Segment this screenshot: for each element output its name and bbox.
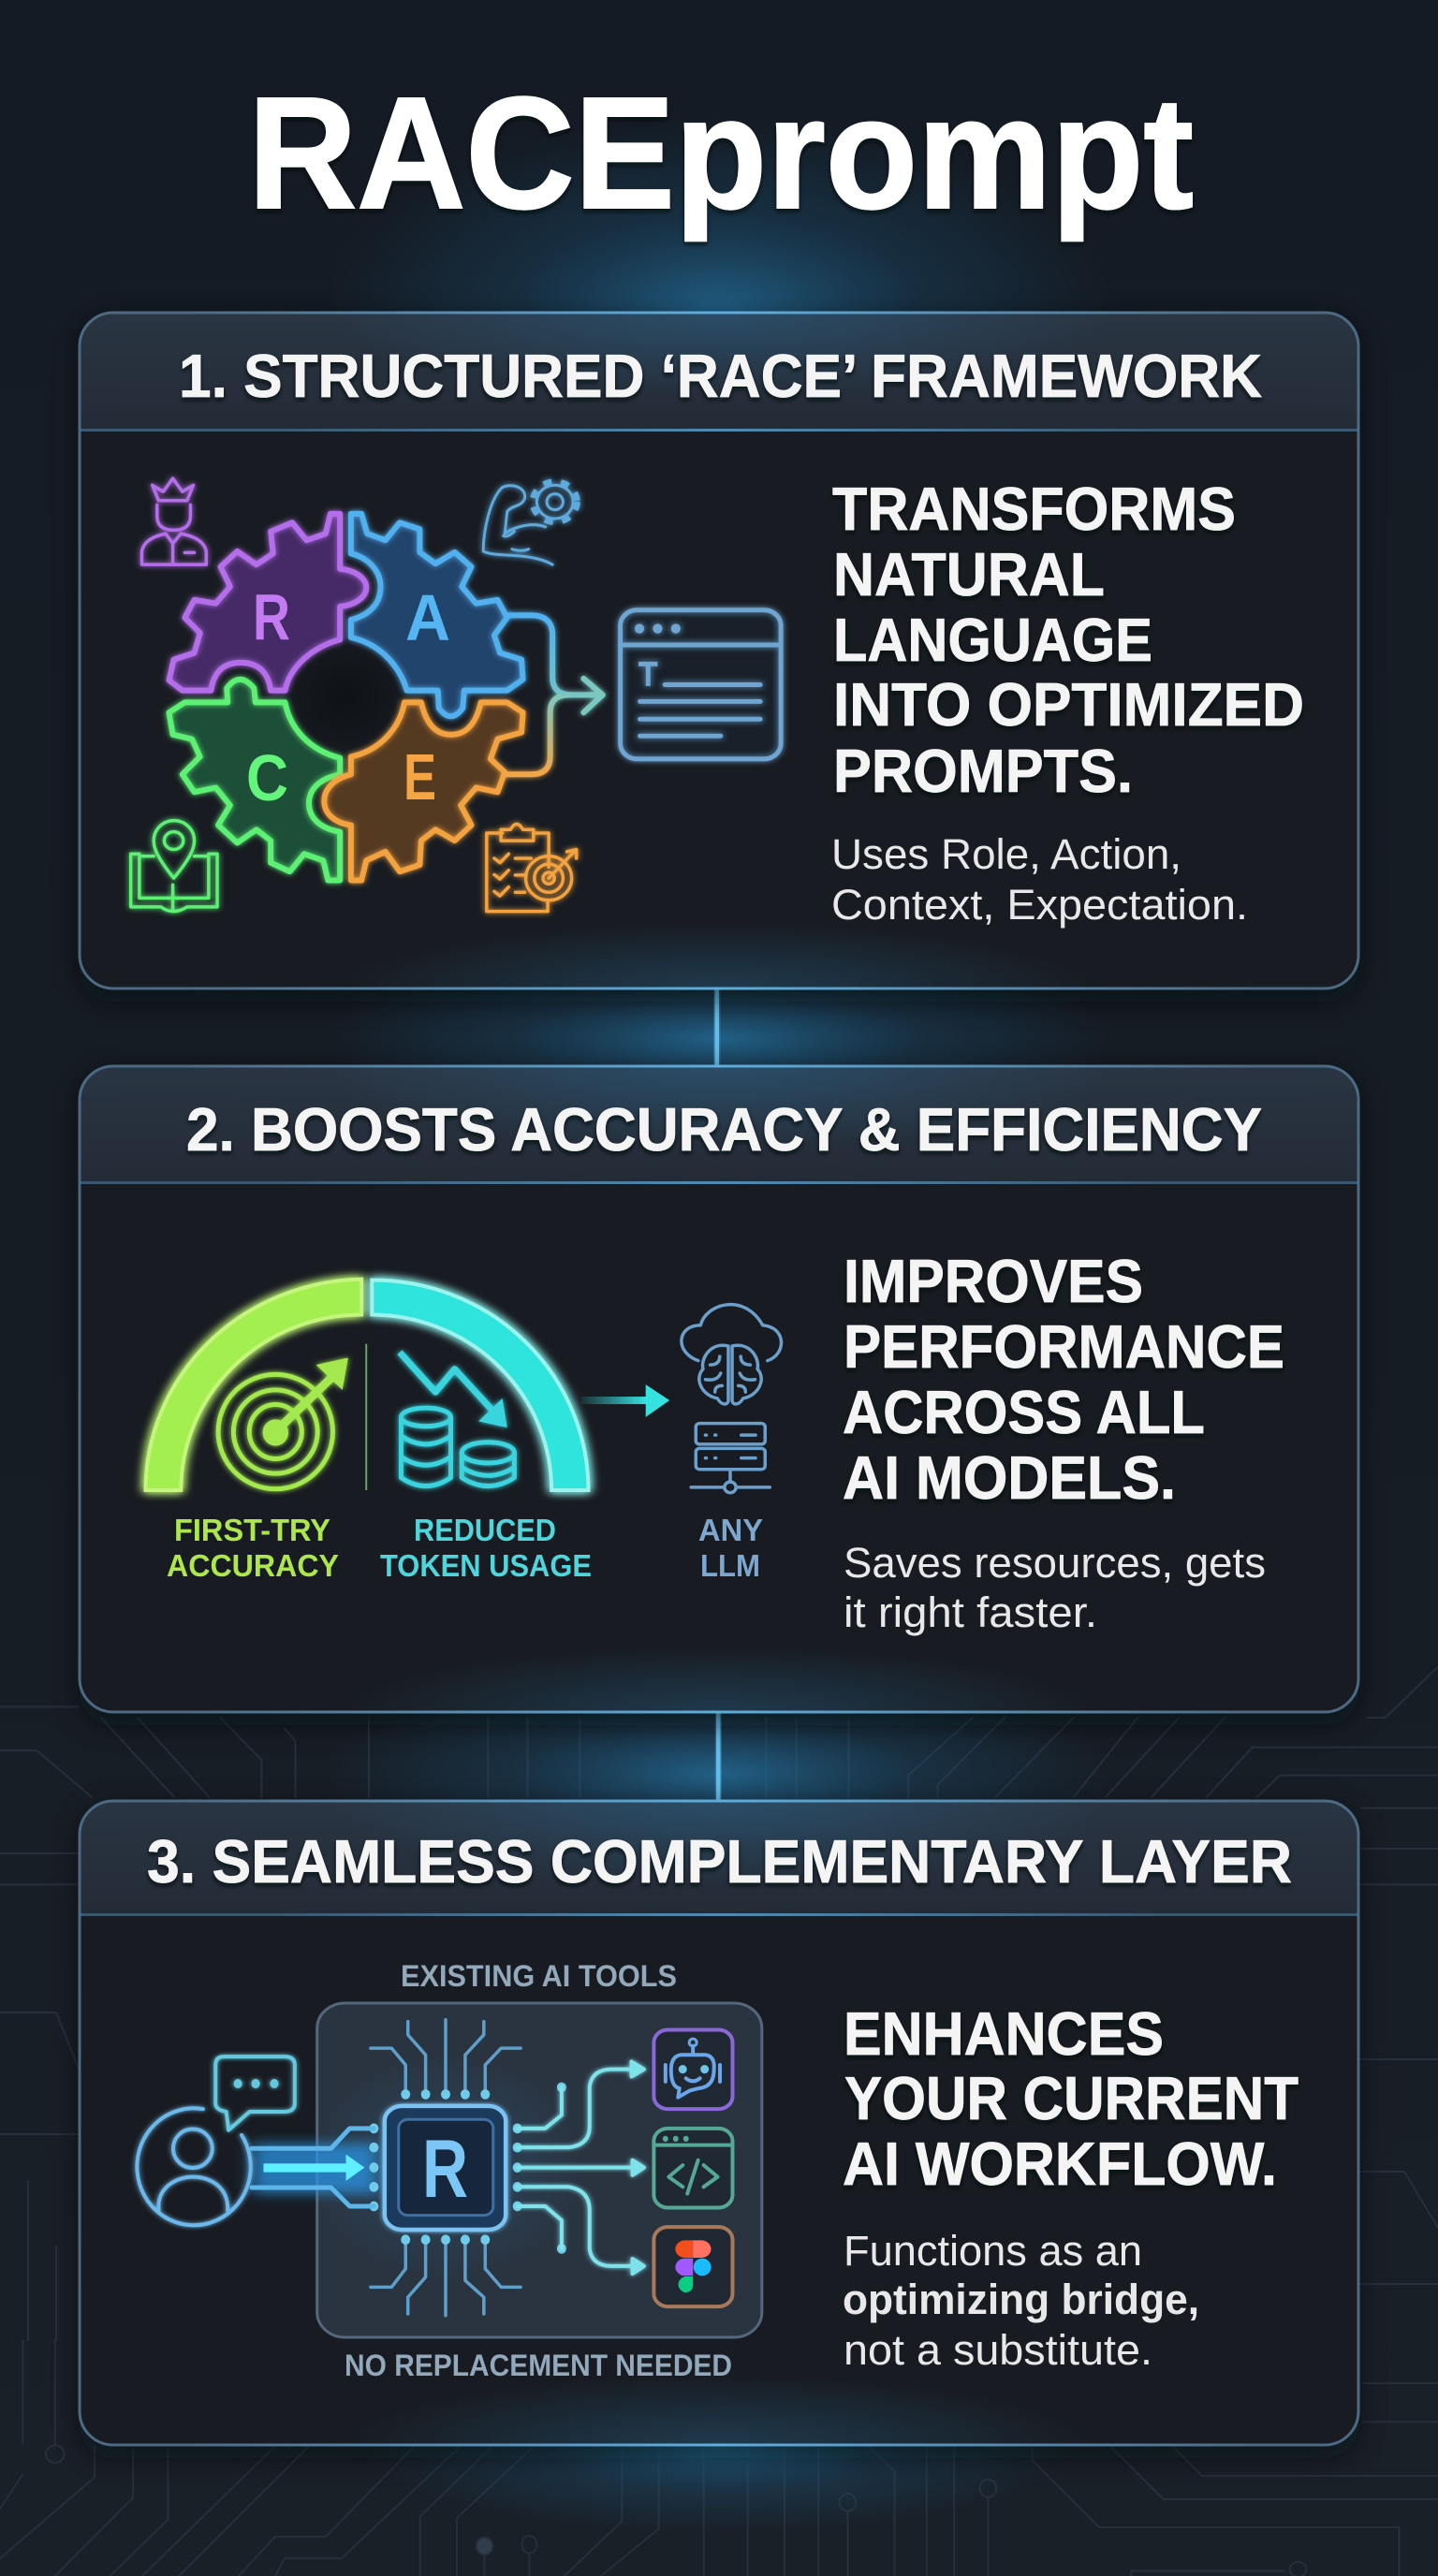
gear letters: A <box>405 581 450 654</box>
heading: card 2: 2. BOOSTS ACCURACY & EFFICIENCY <box>186 1095 1262 1164</box>
text block: card 3 detail <box>843 2227 1199 2374</box>
panel: structured RACE framework <box>77 303 1361 1020</box>
connector glow upper <box>326 941 1112 1137</box>
text block: card 1 statement: TRANSFORMS <box>832 475 1236 543</box>
icon: cloud brain and server <box>682 1305 782 1493</box>
text block: card 2 detail: Saves resources, gets <box>844 1539 1266 1587</box>
arrow: gears to prompt <box>507 615 603 774</box>
label: any LLM: LLM <box>700 1548 760 1583</box>
text block: card 1 detail <box>831 830 1248 929</box>
input beam glow <box>252 2144 377 2193</box>
connector: card 2 to card 3 <box>716 1712 721 1801</box>
text block: card 3 detail: Functions as an <box>844 2227 1142 2275</box>
gauge arc: first-try accuracy <box>146 1280 361 1490</box>
text block: card 1 detail: Context, Expectation. <box>831 881 1248 929</box>
icon: context <box>131 821 217 912</box>
connector glow lower <box>326 1666 1112 1881</box>
text block: card 2 detail <box>844 1539 1266 1636</box>
text block: card 1 statement: PROMPTS. <box>833 737 1133 805</box>
text block: card 1 statement <box>832 475 1304 805</box>
label: first-try accuracy: ACCURACY <box>167 1548 339 1583</box>
title: RACEprompt <box>248 65 1194 242</box>
label: reduced token usage: REDUCED <box>414 1513 556 1547</box>
text block: card 2 statement: IMPROVES <box>844 1247 1143 1315</box>
text block: card 2 statement <box>843 1247 1284 1512</box>
gear E <box>324 702 523 881</box>
diagram: RACE gears <box>131 478 781 912</box>
icon: role <box>141 478 206 564</box>
text block: card 1 statement: INTO OPTIMIZED <box>833 670 1304 739</box>
label: first-try accuracy <box>167 1513 339 1583</box>
arrow: user input beam <box>252 2129 374 2206</box>
gauge arc: reduced token usage <box>372 1280 588 1490</box>
gear letters <box>246 580 450 814</box>
label: any LLM <box>698 1513 763 1583</box>
bottom glow <box>363 2364 1075 2532</box>
label: reduced token usage: TOKEN USAGE <box>380 1548 592 1583</box>
panel: seamless complementary layer <box>71 1788 1367 2471</box>
panel: boosts accuracy and efficiency <box>76 1052 1362 1745</box>
label: reduced token usage <box>380 1513 592 1583</box>
text block: card 3 detail: not a substitute. <box>844 2326 1152 2374</box>
text block: card 2 statement: ACROSS ALL <box>843 1378 1205 1446</box>
label: any LLM: ANY <box>698 1513 763 1547</box>
icon tile: AI chatbot <box>653 2030 732 2109</box>
arrows: output to tools <box>518 2061 644 2274</box>
label: first-try accuracy: FIRST-TRY <box>174 1513 330 1547</box>
text block: card 2 statement: AI MODELS. <box>843 1443 1176 1512</box>
heading: card 1: 1. STRUCTURED ‘RACE’ FRAMEWORK <box>179 342 1262 410</box>
text block: card 3 statement: AI WORKFLOW. <box>843 2130 1277 2198</box>
icon: prompt window <box>621 610 781 759</box>
chart: accuracy and token gauge <box>146 1280 782 1583</box>
icon: action <box>483 481 578 564</box>
label: existing AI tools: EXISTING AI TOOLS <box>401 1959 677 1993</box>
gear C <box>169 680 340 881</box>
icon tile: Figma <box>653 2227 732 2306</box>
text block: card 1 detail: Uses Role, Action, <box>831 830 1181 878</box>
icon tile: code window <box>653 2129 732 2207</box>
text block: card 3 statement <box>843 1999 1299 2198</box>
text block: card 1 statement: LANGUAGE <box>833 606 1152 674</box>
icon: R chip <box>385 2106 506 2230</box>
gear R <box>169 514 366 691</box>
icon: expectation <box>487 824 577 912</box>
top glow <box>326 117 1112 510</box>
heading: card 3: 3. SEAMLESS COMPLEMENTARY LAYER <box>147 1827 1292 1895</box>
text block: card 3 statement: YOUR CURRENT <box>844 2064 1299 2132</box>
icon: target <box>218 1358 348 1489</box>
diagram: user to R layer to tools <box>137 2003 762 2337</box>
text block: card 1 statement: NATURAL <box>833 540 1105 608</box>
text block: card 3 detail: optimizing bridge, <box>843 2276 1199 2323</box>
text block: card 2 detail: it right faster. <box>844 1588 1097 1636</box>
arrow: to any LLM <box>581 1384 669 1417</box>
icon: user with speech bubble <box>137 2056 295 2225</box>
gear A <box>351 514 523 716</box>
panel: existing tools box <box>317 2003 762 2337</box>
circuit traces <box>371 2020 521 2316</box>
gear letters: E <box>404 740 436 813</box>
text block: card 3 statement: ENHANCES <box>844 1999 1164 2068</box>
icon: falling trend and coins <box>400 1353 514 1486</box>
gear letters: R <box>253 580 290 653</box>
label: no replacement needed: NO REPLACEMENT NEEDED <box>345 2349 732 2382</box>
chip letter R: R <box>422 2122 468 2215</box>
gear letters: C <box>246 741 288 814</box>
connector: card 1 to card 2 <box>715 989 719 1066</box>
text block: card 2 statement: PERFORMANCE <box>844 1312 1284 1381</box>
